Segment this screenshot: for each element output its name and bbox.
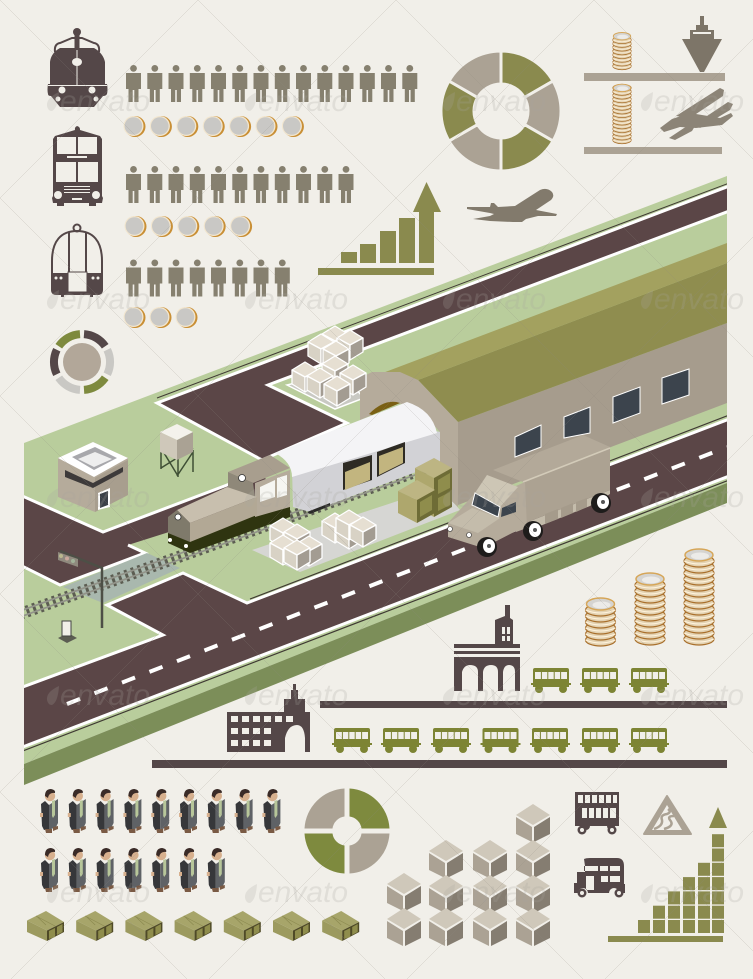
people row 3 [126,260,290,296]
pallet under back pile [285,383,360,410]
station icon large [227,684,310,752]
watermark text: envato [654,283,744,316]
watermark text: envato [456,481,546,514]
watermark text: envato [258,481,348,514]
station icon small [454,605,520,691]
donut chart: six segments [441,51,561,171]
box pile: on platform right [322,510,376,549]
watermark text: envato [60,85,150,118]
truck [448,435,611,557]
watermark text: envato [654,679,744,712]
traffic light [58,551,102,628]
coins row 2 [124,216,252,237]
building [58,442,128,512]
quarter pie chart [304,788,390,874]
upper road [157,185,732,460]
level crossing [63,553,180,603]
main road [20,418,732,748]
wagon [275,402,440,514]
ring chart with central disc [54,334,110,390]
water tower [160,424,193,477]
airliner silhouette [467,189,557,222]
stacked cargo boxes by warehouse [398,458,452,523]
watermark text [60,85,744,909]
left road borders [20,482,235,585]
coins row 3 [124,307,198,328]
watermark text: envato [258,876,348,909]
watermark text: envato [654,876,744,909]
staff figures row 2 [40,848,225,892]
shelf 1 [320,701,727,708]
coach front icon [52,126,103,206]
coin stacks growing [586,549,714,646]
watermark leaf marks [46,92,753,912]
warehouse [360,243,727,507]
trackside device [58,621,77,643]
coins row 1 [124,116,304,137]
watermark text: envato [60,481,150,514]
biplane and coin stack on shelf [584,84,733,154]
road dark edge lines [20,414,732,752]
watermark text: envato [654,481,744,514]
watermark text: envato [456,876,546,909]
left road [24,478,266,584]
ground edge strip [24,483,727,785]
locomotive front icon [48,28,108,107]
road lane dashes [67,447,727,704]
watermark text: envato [60,283,150,316]
watermark text: envato [258,283,348,316]
watermark text: envato [60,679,150,712]
box pile: on platform left [270,518,322,570]
watermark text: envato [60,876,150,909]
watermark text: envato [456,283,546,316]
watermark text: envato [654,85,744,118]
isometric scene: railway depot [20,176,732,785]
watermark text: envato [456,679,546,712]
parcel boxes row [27,911,359,941]
ground plane [24,176,727,764]
people row 2 [126,166,354,203]
cargo platform [252,497,460,572]
cube stack chart [387,804,550,946]
carriages row 1 [531,668,669,693]
rising bar chart with arrow [318,182,441,275]
windows [515,425,541,457]
ship and coin stack on shelf [584,16,725,81]
double-decker bus: front elevation [575,792,619,834]
metro front icon [52,224,102,297]
staff figures row 1 [40,789,280,833]
box pile: back of yard [292,326,366,406]
upper road dark edge [157,182,732,398]
double-decker bus: side [574,858,625,898]
shelf 2 [152,760,727,768]
road warning sign [644,796,691,834]
watermark text: envato [456,85,546,118]
railway track [20,460,440,617]
locomotive [168,455,290,553]
watermark text: envato [258,679,348,712]
people row 1 [126,65,417,102]
watermark text: envato [258,85,348,118]
carriages row 2 [332,728,669,753]
step chart with arrow [608,807,727,942]
